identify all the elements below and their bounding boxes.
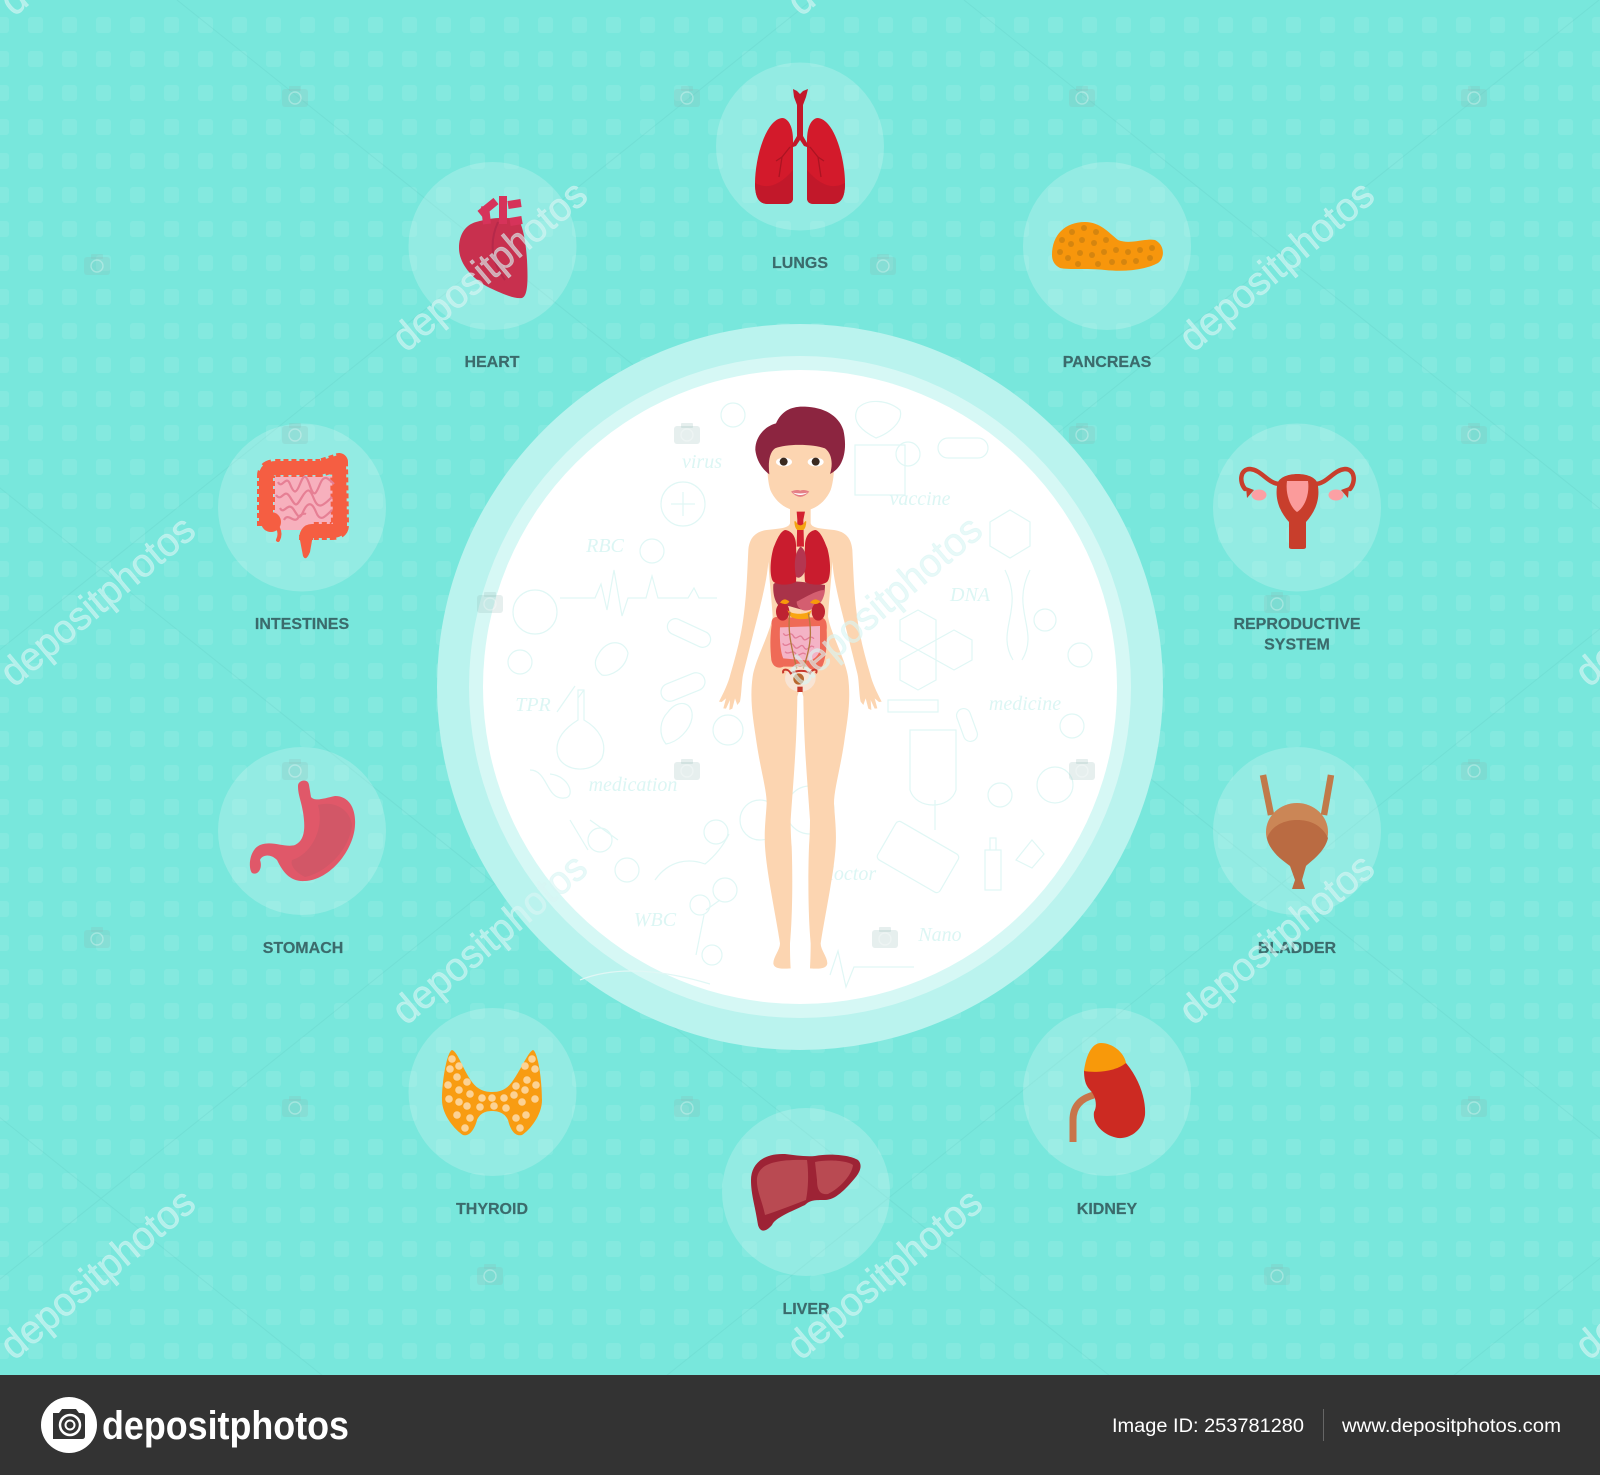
medical doodle background: medicine xyxy=(989,693,1061,715)
watermarks: depositphotos xyxy=(384,845,596,1033)
image id: Image ID: 253781280 xyxy=(1112,1416,1304,1437)
medical doodle background: medication xyxy=(589,774,677,796)
organ: stomach xyxy=(218,747,386,915)
medical doodle background: RBC xyxy=(585,535,625,557)
label: reproductive system xyxy=(1233,616,1361,654)
organs overlay xyxy=(770,512,830,692)
site url: www.depositphotos.com xyxy=(1341,1415,1561,1437)
footer logo xyxy=(41,1397,349,1453)
footer logo: depositphotos xyxy=(102,1404,349,1448)
label: intestines: INTESTINES xyxy=(255,616,349,633)
face xyxy=(776,458,824,497)
central circle xyxy=(437,324,1163,1050)
medical doodle background: doctor xyxy=(824,863,876,885)
watermarks: depositphotos xyxy=(779,507,991,695)
organ: kidney xyxy=(1023,1008,1191,1176)
body xyxy=(719,438,882,969)
label: lungs: LUNGS xyxy=(772,255,828,272)
medical doodle background: Nano xyxy=(917,924,962,946)
organ: bladder xyxy=(1213,747,1381,915)
label: pancreas: PANCREAS xyxy=(1063,354,1152,371)
watermarks: depositphotos xyxy=(1171,172,1383,360)
medical doodle background: vaccine xyxy=(889,488,951,510)
organ: thyroid xyxy=(408,1008,576,1176)
hair xyxy=(755,407,845,474)
watermarks: depositphotos xyxy=(384,172,596,360)
watermark camera icons xyxy=(84,86,1487,1285)
label: stomach: STOMACH xyxy=(263,940,343,957)
organ: reproductive system xyxy=(1213,424,1381,592)
medical doodle background: virus xyxy=(682,451,722,473)
medical doodle background: DNA xyxy=(949,584,991,606)
watermarks: depositphotos xyxy=(779,1180,991,1368)
label: reproductive system: SYSTEM xyxy=(1264,636,1330,654)
label: thyroid: THYROID xyxy=(456,1201,528,1218)
human figure xyxy=(719,407,882,969)
label: bladder: BLADDER xyxy=(1258,940,1337,957)
medical doodle background: TPR xyxy=(515,694,551,716)
medical doodle background xyxy=(508,401,1092,987)
label: kidney: KIDNEY xyxy=(1077,1201,1138,1218)
medical doodle background: WBC xyxy=(634,909,677,931)
organ: pancreas xyxy=(1023,162,1191,330)
organ: lungs xyxy=(716,62,884,230)
organ: intestines xyxy=(218,424,386,592)
watermarks: depositphotos xyxy=(1171,845,1383,1033)
label: liver: LIVER xyxy=(782,1301,830,1318)
organ: heart xyxy=(408,162,576,330)
label: heart: HEART xyxy=(464,354,520,371)
label: reproductive system: REPRODUCTIVE xyxy=(1233,616,1361,633)
footer bar xyxy=(0,1375,1600,1475)
organ: liver xyxy=(722,1108,890,1276)
